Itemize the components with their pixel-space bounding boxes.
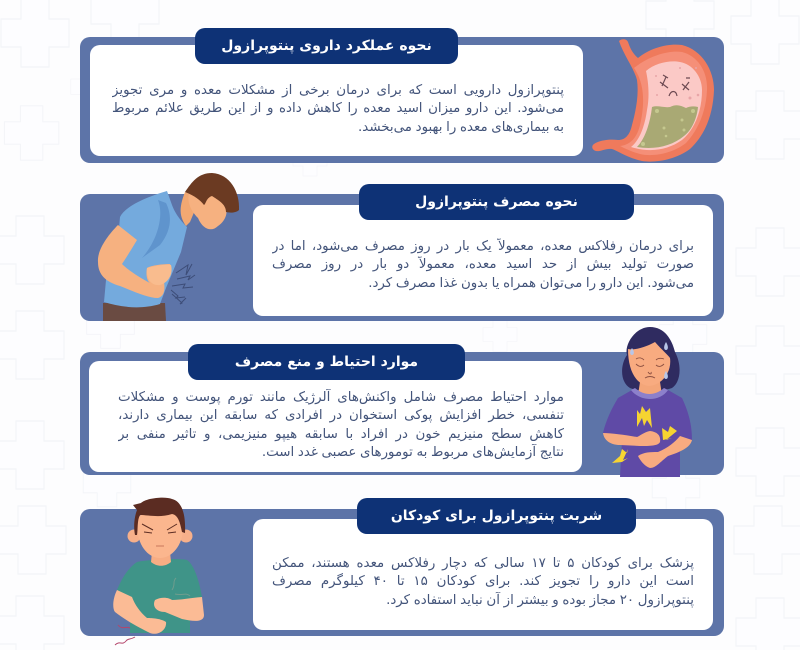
text block: precautions [118, 389, 564, 460]
heading: how to take it: نحوه مصرف پنتوپرازول [415, 194, 578, 210]
text block: syrup for children [272, 556, 694, 608]
heading: precautions [188, 344, 465, 380]
text block: how the drug works: پنتوپرازول دارویی است که برای درمان برخی از مشکلات معده و مری تجویز [112, 83, 564, 98]
text block: how the drug works: می‌شود. این دارو میزان اسید معده را کاهش داده و از این طریق علائم مربوط [112, 101, 564, 116]
text card: how to take it [253, 205, 713, 316]
heading: how the drug works [195, 28, 458, 64]
text block: how to take it: می‌شود. این دارو را می‌توان همراه یا بدون غذا مصرف کرد. [368, 276, 694, 291]
text card: precautions [89, 361, 582, 472]
text block: precautions: موارد احتیاط مصرف شامل واکنش‌های آلرژیک مانند تورم پوست و مشکلات [118, 390, 564, 405]
heading: how to take it [359, 184, 634, 220]
text block: how to take it: برای درمان رفلاکس معده، معمولاً یک بار در روز مصرف می‌شود، اما در [272, 239, 694, 254]
text block: syrup for children: پزشک برای کودکان ۵ تا ۱۷ سالی که دچار رفلاکس معده هستند، ممکن [272, 556, 694, 571]
text block: how the drug works: به بیماری‌های معده را بهبود می‌بخشد. [358, 120, 564, 135]
text block: precautions: کاهش سطح منیزیم خون در افراد با سابقه هیپو منیزیمی، و تاثیر منفی بر [118, 427, 564, 442]
panel: how to take it [80, 194, 724, 321]
panel: precautions [80, 352, 724, 475]
text block: syrup for children: است این دارو را تجویز کند. برای کودکان ۱۵ تا ۴۰ کیلوگرم مصرف [272, 574, 694, 589]
heading: precautions: موارد احتیاط و منع مصرف [235, 354, 418, 370]
heading: how the drug works: نحوه عملکرد داروی پنتوپرازول [221, 38, 432, 54]
text block: syrup for children: پنتوپرازول ۲۰ مجاز بوده و بیشتر از آن نباید استفاده کرد. [386, 593, 694, 608]
text block: how to take it [272, 238, 694, 291]
text card: syrup for children [253, 519, 713, 630]
text block: precautions: تنفسی، خطر افزایش پوکی استخوان در افرادی که سابقه این بیماری دارند، [118, 408, 564, 423]
text block: how to take it: صورت تولید بیش از حد اسید معده، معمولاً دو بار در روز مصرف [272, 257, 694, 272]
heading: syrup for children [357, 498, 636, 534]
text block: precautions: نتایج آزمایش‌های مربوط به تومورهای عصبی غدد است. [262, 445, 564, 460]
panel: syrup for children [80, 509, 724, 636]
panel: how the drug works [80, 37, 724, 163]
text block: how the drug works [112, 83, 564, 135]
heading: syrup for children: شربت پنتوپرازول برای کودکان [391, 508, 602, 524]
text card: how the drug works [90, 45, 583, 156]
